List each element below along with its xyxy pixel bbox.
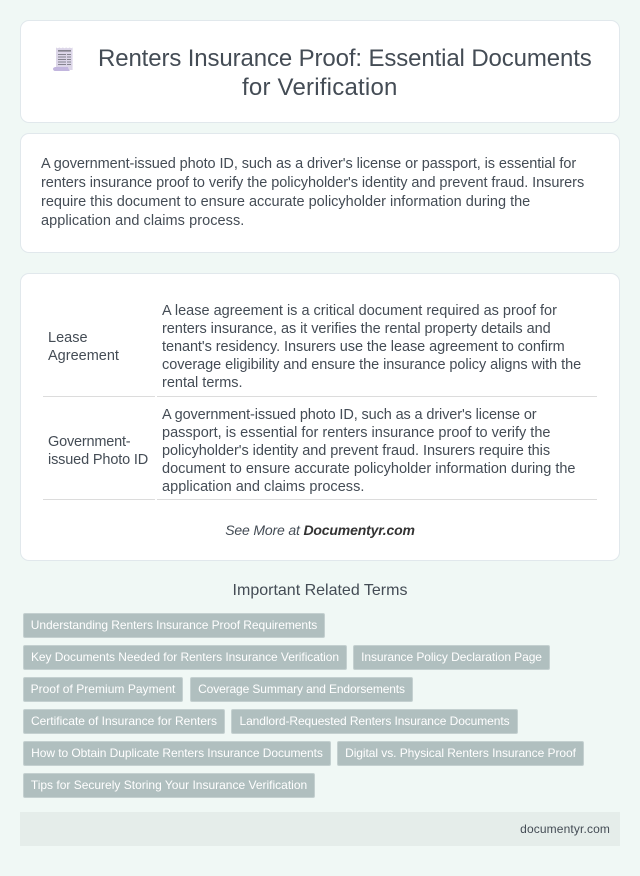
footer source: documentyr.com (520, 822, 610, 836)
tag: Digital vs. Physical Renters Insurance Proof (345, 746, 576, 760)
row description: renters insurance, as it verifies the rental property details and (162, 321, 551, 337)
row: lease agreement (48, 303, 581, 391)
intro text (41, 156, 584, 229)
row description: A government-issued photo ID, such as a driver's license or (162, 407, 536, 423)
tag (23, 773, 315, 798)
row description (162, 407, 576, 495)
intro text: require this document to ensure accurate policyholder information during the (41, 194, 530, 210)
tag: Key Documents Needed for Renters Insurance Verification (31, 650, 339, 664)
document table panel (20, 273, 620, 561)
title (98, 45, 592, 101)
row description: tenant's residency. Insurers use the lease agreement to confirm (162, 339, 565, 355)
row description: coverage eligibility and ensure the insurance policy aligns with the (162, 357, 581, 373)
tag (190, 677, 413, 702)
title: Renters Insurance Proof: Essential Documents (98, 45, 592, 72)
intro text panel (20, 133, 620, 253)
title: for Verification (242, 74, 398, 101)
tag (337, 741, 584, 766)
row description: rental terms. (162, 375, 243, 391)
tag (23, 645, 347, 670)
header panel (20, 20, 620, 123)
row label: Government- (48, 434, 130, 450)
see more link: See More at Documentyr.com (225, 522, 415, 538)
row label: Agreement (48, 348, 119, 364)
tag: Tips for Securely Storing Your Insurance Verification (31, 778, 307, 792)
intro text: renters insurance proof to verify the policyholder's identity and prevent fraud. Insurers (41, 175, 584, 191)
intro text: A government-issued photo ID, such as a driver's license or passport, is essential for (41, 156, 576, 172)
tag (353, 645, 550, 670)
tag: How to Obtain Duplicate Renters Insurance Documents (31, 746, 323, 760)
row description: document to ensure accurate policyholder information during the (162, 461, 576, 477)
tag: Landlord-Requested Renters Insurance Documents (239, 714, 510, 728)
row: government-issued photo id (48, 407, 576, 495)
tag (23, 709, 225, 734)
tag (23, 741, 331, 766)
tag: Proof of Premium Payment (31, 682, 175, 696)
row description: A lease agreement is a critical document required as proof for (162, 303, 557, 319)
tag (23, 677, 183, 702)
tag: Coverage Summary and Endorsements (198, 682, 405, 696)
row label: issued Photo ID (48, 452, 148, 468)
tag: Understanding Renters Insurance Proof Requirements (31, 618, 317, 632)
footer bar (20, 812, 620, 846)
row description: application and claims process. (162, 479, 364, 495)
related terms tags (23, 613, 584, 798)
row label (48, 434, 148, 468)
tag (23, 613, 325, 638)
row description: passport, is essential for renters insurance proof to verify the (162, 425, 550, 441)
icon: document receipt (53, 48, 72, 71)
tag: Certificate of Insurance for Renters (31, 714, 217, 728)
row description: policyholder's identity and prevent fraud. Insurers require this (162, 443, 550, 459)
row label (48, 330, 119, 364)
intro text: application and claims process. (41, 213, 244, 229)
row description (162, 303, 581, 391)
row label: Lease (48, 330, 88, 346)
tag: Insurance Policy Declaration Page (361, 650, 542, 664)
tag (231, 709, 518, 734)
related terms heading: Important Related Terms (233, 582, 407, 599)
